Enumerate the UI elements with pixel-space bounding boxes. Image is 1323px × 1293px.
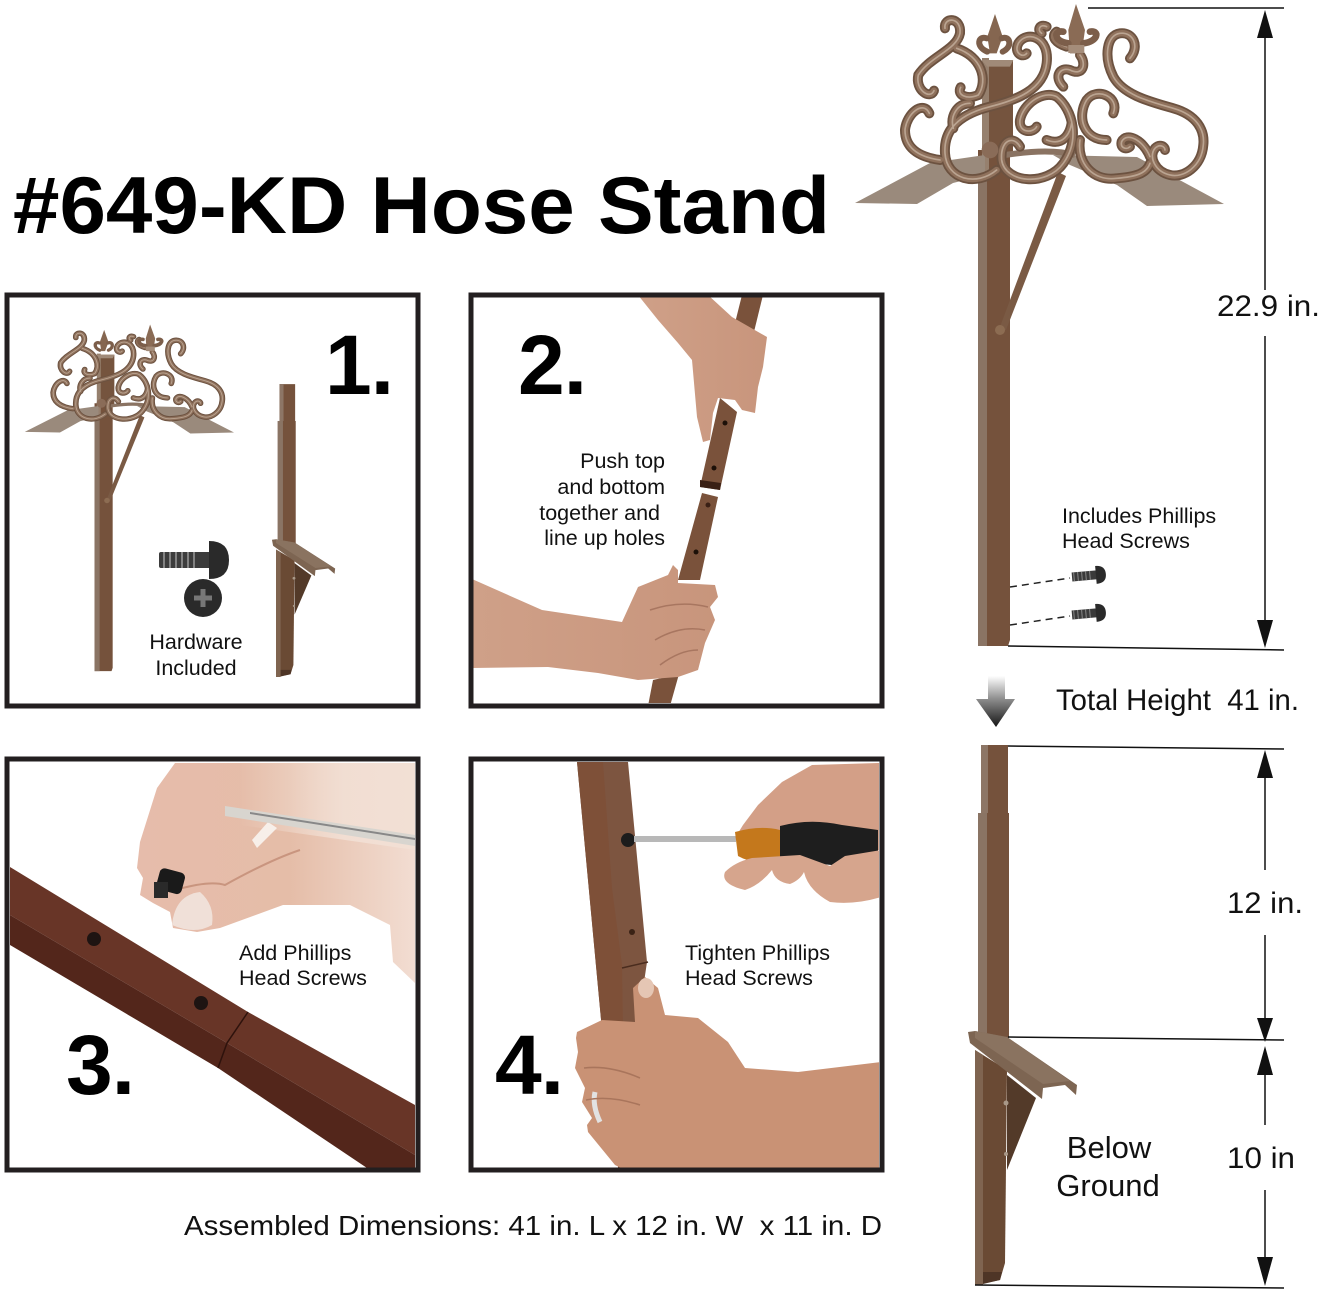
assembled stand: bottom section — [968, 745, 1077, 1285]
below ground label: Below — [1067, 1130, 1152, 1165]
step 3 photo: tube, hand and screw — [10, 763, 415, 1170]
assembled stand: top section — [855, 4, 1224, 646]
title: #649-KD Hose Stand — [13, 161, 830, 251]
step 4 photo: tube, hands and screwdriver — [575, 762, 881, 1170]
step 2 photo: hands and tube — [472, 295, 767, 706]
assembled dimensions caption: Assembled Dimensions: 41 in. L x 12 in. W x 11 in. D — [184, 1210, 882, 1241]
step 4 number: 4. — [495, 1018, 563, 1112]
step 2 frame background — [470, 295, 883, 706]
dimension: 22.9 in: 22.9 in. — [1217, 290, 1320, 323]
dimension: 10 in: 10 in — [1227, 1142, 1295, 1175]
icon: screw side view — [159, 541, 229, 579]
step 3 number: 3. — [66, 1018, 134, 1112]
panel: step 3 — [7, 759, 418, 1170]
dimension: 10 in — [975, 1046, 1295, 1288]
panel: step 4 — [471, 759, 882, 1170]
panel: step 1 — [7, 295, 418, 706]
step 3 frame background — [7, 759, 418, 1170]
step 4 frame background — [471, 759, 882, 1170]
upper screw dashed guide — [1010, 578, 1070, 587]
step 1 bottom section of stand — [272, 384, 335, 677]
step 2 caption: Push top — [580, 449, 665, 473]
step 2 caption: line up holes — [544, 526, 665, 550]
step 3 border — [7, 759, 418, 1170]
total height arrow — [976, 676, 1015, 727]
hardware caption: Included — [155, 656, 237, 680]
panel: step 2 — [470, 295, 883, 706]
icon: screw head view — [184, 579, 222, 617]
dimension: 12 in — [1008, 746, 1303, 1042]
icon: upper screw — [1071, 565, 1107, 586]
step 2 caption: together and — [539, 501, 660, 525]
below ground label: Ground — [1056, 1168, 1160, 1203]
dimension: 12 in: 12 in. — [1227, 887, 1303, 920]
step 2 caption: and bottom — [557, 475, 665, 499]
step 2 border — [471, 295, 882, 706]
screws caption: Includes Phillips — [1062, 504, 1216, 528]
step 3 caption: Head Screws — [239, 966, 367, 990]
step 4 caption: Tighten Phillips — [685, 941, 830, 965]
lower screw dashed guide — [1010, 616, 1070, 625]
callout: includes phillips head screws — [1010, 504, 1216, 625]
step 1 number: 1. — [325, 318, 393, 412]
step 3 caption: Add Phillips — [239, 941, 351, 965]
step 1 top section of stand — [25, 324, 234, 671]
hardware caption: Hardware — [149, 630, 243, 654]
screws caption: Head Screws — [1062, 529, 1190, 553]
step 4 border — [471, 759, 882, 1170]
step 4 caption: Head Screws — [685, 966, 813, 990]
dimension: 22.9 in — [1008, 8, 1320, 650]
step 1 frame — [7, 295, 418, 706]
step 2 number: 2. — [518, 318, 586, 412]
total height label: Total Height 41 in. — [1056, 684, 1299, 717]
icon: lower screw — [1071, 603, 1107, 624]
